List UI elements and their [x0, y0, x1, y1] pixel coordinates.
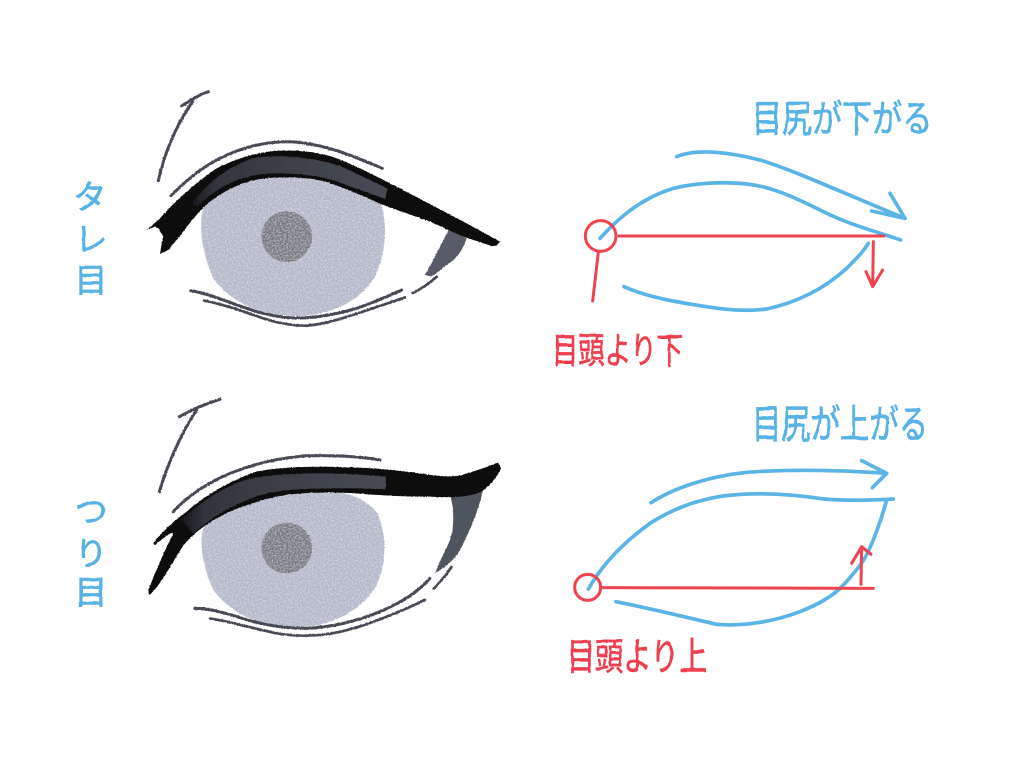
panel: drooping eye diagram [552, 99, 932, 371]
panel: upturned eye (tsuri-me) drawing [148, 399, 501, 636]
diagram strokes [585, 152, 905, 310]
down arrow [866, 242, 883, 287]
inner corner marker [575, 574, 601, 600]
upper eyelash line [148, 462, 501, 595]
vertical label: タレ目: 目 [74, 262, 108, 299]
vertical label: つり目: り [74, 535, 108, 572]
vertical label: つり目: つ [74, 493, 108, 530]
upper eyelash line [147, 151, 500, 254]
vertical label: タレ目: レ [74, 221, 108, 258]
label: higher than inner corner: 目頭より上 [567, 637, 707, 679]
vertical label: つり目 [74, 493, 108, 611]
up arrow [852, 547, 871, 584]
horizontal reference line [602, 583, 873, 593]
vertical label: タレ目: タ [74, 179, 106, 216]
eyelid grey fill [192, 156, 387, 206]
eye corner shadow [425, 228, 467, 277]
leader line [593, 252, 598, 301]
pupil [261, 523, 312, 573]
panel: upturned eye diagram [567, 403, 928, 679]
vertical label: つり目: 目 [74, 574, 108, 611]
horizontal reference line [619, 231, 884, 240]
pupil [261, 211, 312, 262]
heading: outer corner goes up: 目尻が上がる [752, 403, 928, 447]
direction arrow in blue [651, 461, 887, 503]
iris [202, 489, 384, 627]
label: lower than inner corner: 目頭より下 [552, 330, 683, 371]
eye outline in blue [600, 183, 901, 310]
eye corner shadow [435, 492, 483, 573]
inner corner marker [585, 221, 616, 251]
panel: drooping eye (tare-me) drawing [147, 92, 500, 326]
eye outline in blue [588, 494, 893, 625]
iris [201, 177, 385, 316]
eyelid crease, brow and lower lid lines [158, 92, 437, 326]
vertical label: タレ目 [74, 179, 108, 299]
heading: outer corner goes down: 目尻が下がる [752, 99, 932, 141]
direction arrow in blue [677, 152, 905, 218]
eyelid grey fill [182, 473, 386, 534]
diagram strokes [575, 461, 893, 625]
eyelid crease, brow and lower lid lines [159, 399, 452, 636]
